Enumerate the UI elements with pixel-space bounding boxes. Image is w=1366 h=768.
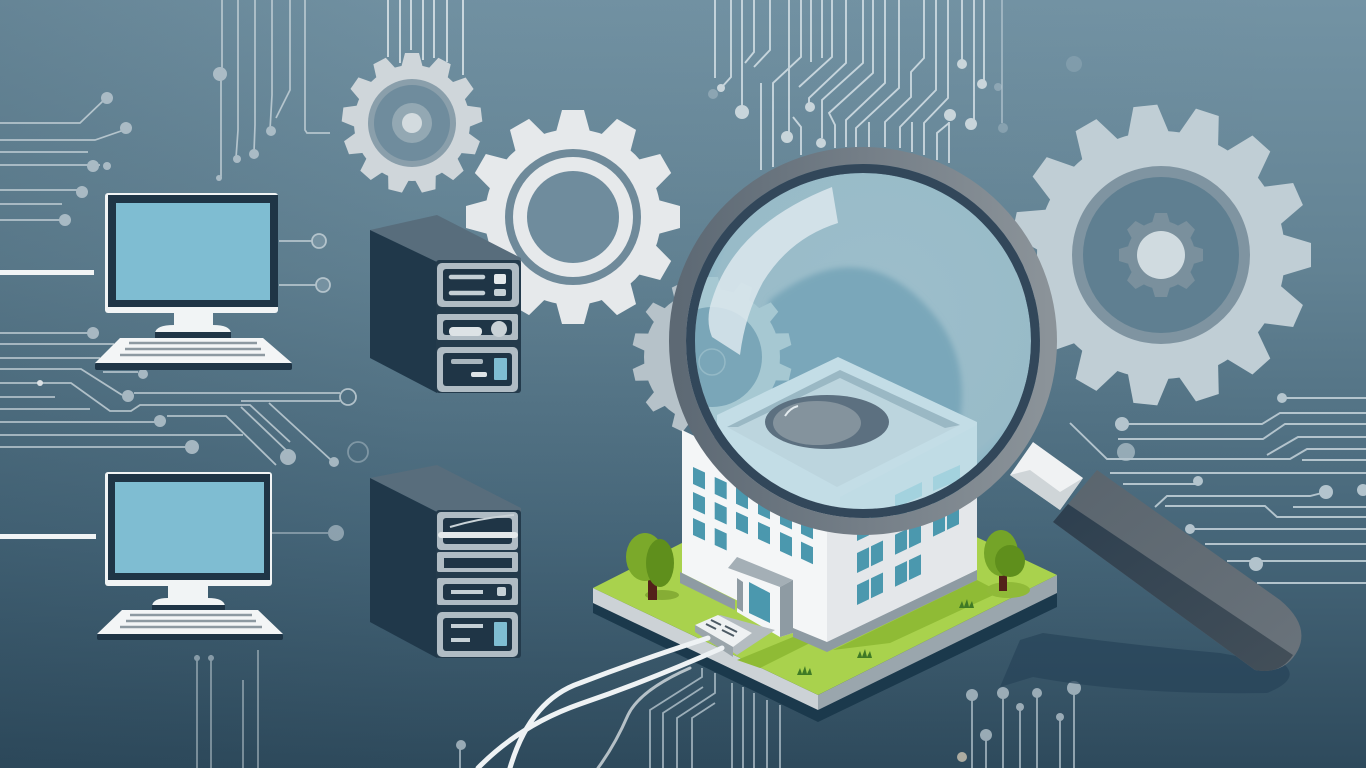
server: upper — [370, 215, 521, 393]
monitor: upper — [0, 193, 292, 370]
highlight crescent — [708, 187, 838, 355]
gear: centre white — [466, 110, 680, 324]
building entrance — [695, 557, 793, 657]
darker central reflection — [767, 266, 964, 504]
gear: behind magnifier — [632, 277, 792, 437]
circuit traces: bottom — [456, 668, 1081, 768]
windows: left face — [693, 467, 813, 590]
gear: top small — [341, 53, 483, 194]
circuit traces: left middle — [0, 234, 368, 467]
circuit traces: top left — [0, 0, 330, 226]
building — [680, 422, 977, 652]
windows: right face — [857, 472, 959, 605]
tree: left — [626, 533, 679, 600]
cables — [478, 638, 722, 768]
magnifier lens — [695, 173, 1031, 509]
magnifier rim — [678, 156, 1048, 526]
gear: large right — [1010, 104, 1311, 406]
monitor: lower — [0, 472, 283, 640]
gear seen through lens — [695, 277, 792, 424]
magnifier handle — [1010, 442, 1301, 671]
magnifier shadow — [1000, 633, 1290, 693]
platform with lawn — [593, 468, 1057, 722]
circuit traces: right — [1070, 393, 1366, 583]
tree: right — [984, 530, 1030, 598]
grass tufts — [797, 599, 974, 675]
server: lower — [370, 465, 521, 658]
circuit traces: top right — [708, 0, 1082, 170]
circuit traces: top centre — [388, 0, 463, 75]
circuit traces: lower left — [194, 525, 344, 768]
roof seen through lens — [717, 357, 977, 509]
